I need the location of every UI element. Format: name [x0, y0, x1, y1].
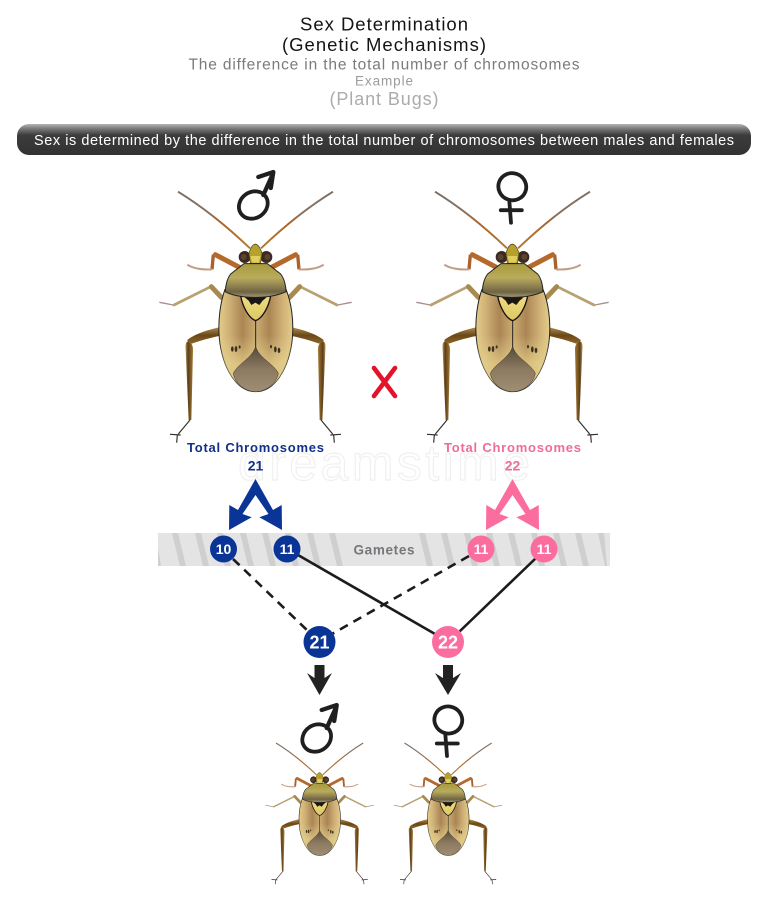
offspring circle: 22: 22	[438, 632, 458, 652]
gamete: male 11	[274, 536, 300, 562]
arrow: female split	[486, 479, 539, 530]
arrow: male split	[229, 479, 282, 530]
gamete: female 11 left: 11	[474, 541, 489, 557]
arrow: down to male offspring	[307, 665, 332, 695]
male chromosome total	[187, 440, 324, 474]
example label: Example	[355, 74, 413, 88]
banner	[17, 124, 751, 155]
gametes band	[158, 533, 610, 566]
gamete: male 11: 11	[280, 541, 295, 557]
offspring circle: 21	[304, 626, 336, 658]
offspring circle: 22	[432, 626, 464, 658]
female chromosome total: 22	[505, 458, 520, 474]
male chromosome total: Total Chromosomes	[187, 440, 324, 455]
female chromosome total	[444, 440, 581, 474]
gamete: 10	[210, 536, 237, 562]
example name: (Plant Bugs)	[330, 89, 438, 109]
male chromosome total: 21	[248, 458, 263, 474]
offspring male bug	[266, 743, 374, 884]
cross sign	[374, 368, 395, 396]
gamete: 10: 10	[216, 541, 231, 557]
gametes band: Gametes	[354, 542, 414, 558]
offspring female bug	[394, 743, 502, 884]
gamete: female 11 right: 11	[537, 541, 552, 557]
male symbol	[234, 172, 273, 224]
offspring female symbol	[431, 703, 466, 756]
female chromosome total: Total Chromosomes	[444, 440, 581, 455]
title: (Genetic Mechanisms)	[282, 34, 486, 55]
cross lines	[233, 555, 536, 634]
gamete: female 11 right	[530, 536, 558, 562]
banner: Sex is determined by the difference in the total number of chromosomes between males and females	[34, 133, 734, 149]
arrow: down to female offspring	[435, 665, 461, 695]
female plant bug	[416, 192, 609, 443]
gamete: female 11 left	[468, 536, 494, 562]
title	[282, 14, 486, 55]
offspring circle: 21: 21	[309, 632, 330, 652]
offspring male symbol	[297, 705, 337, 757]
subtitle: The difference in the total number of chromosomes	[188, 56, 580, 74]
title: Sex Determination	[300, 14, 468, 34]
male plant bug	[159, 192, 352, 443]
watermark: dreamstime	[238, 435, 530, 491]
female symbol	[495, 169, 530, 223]
